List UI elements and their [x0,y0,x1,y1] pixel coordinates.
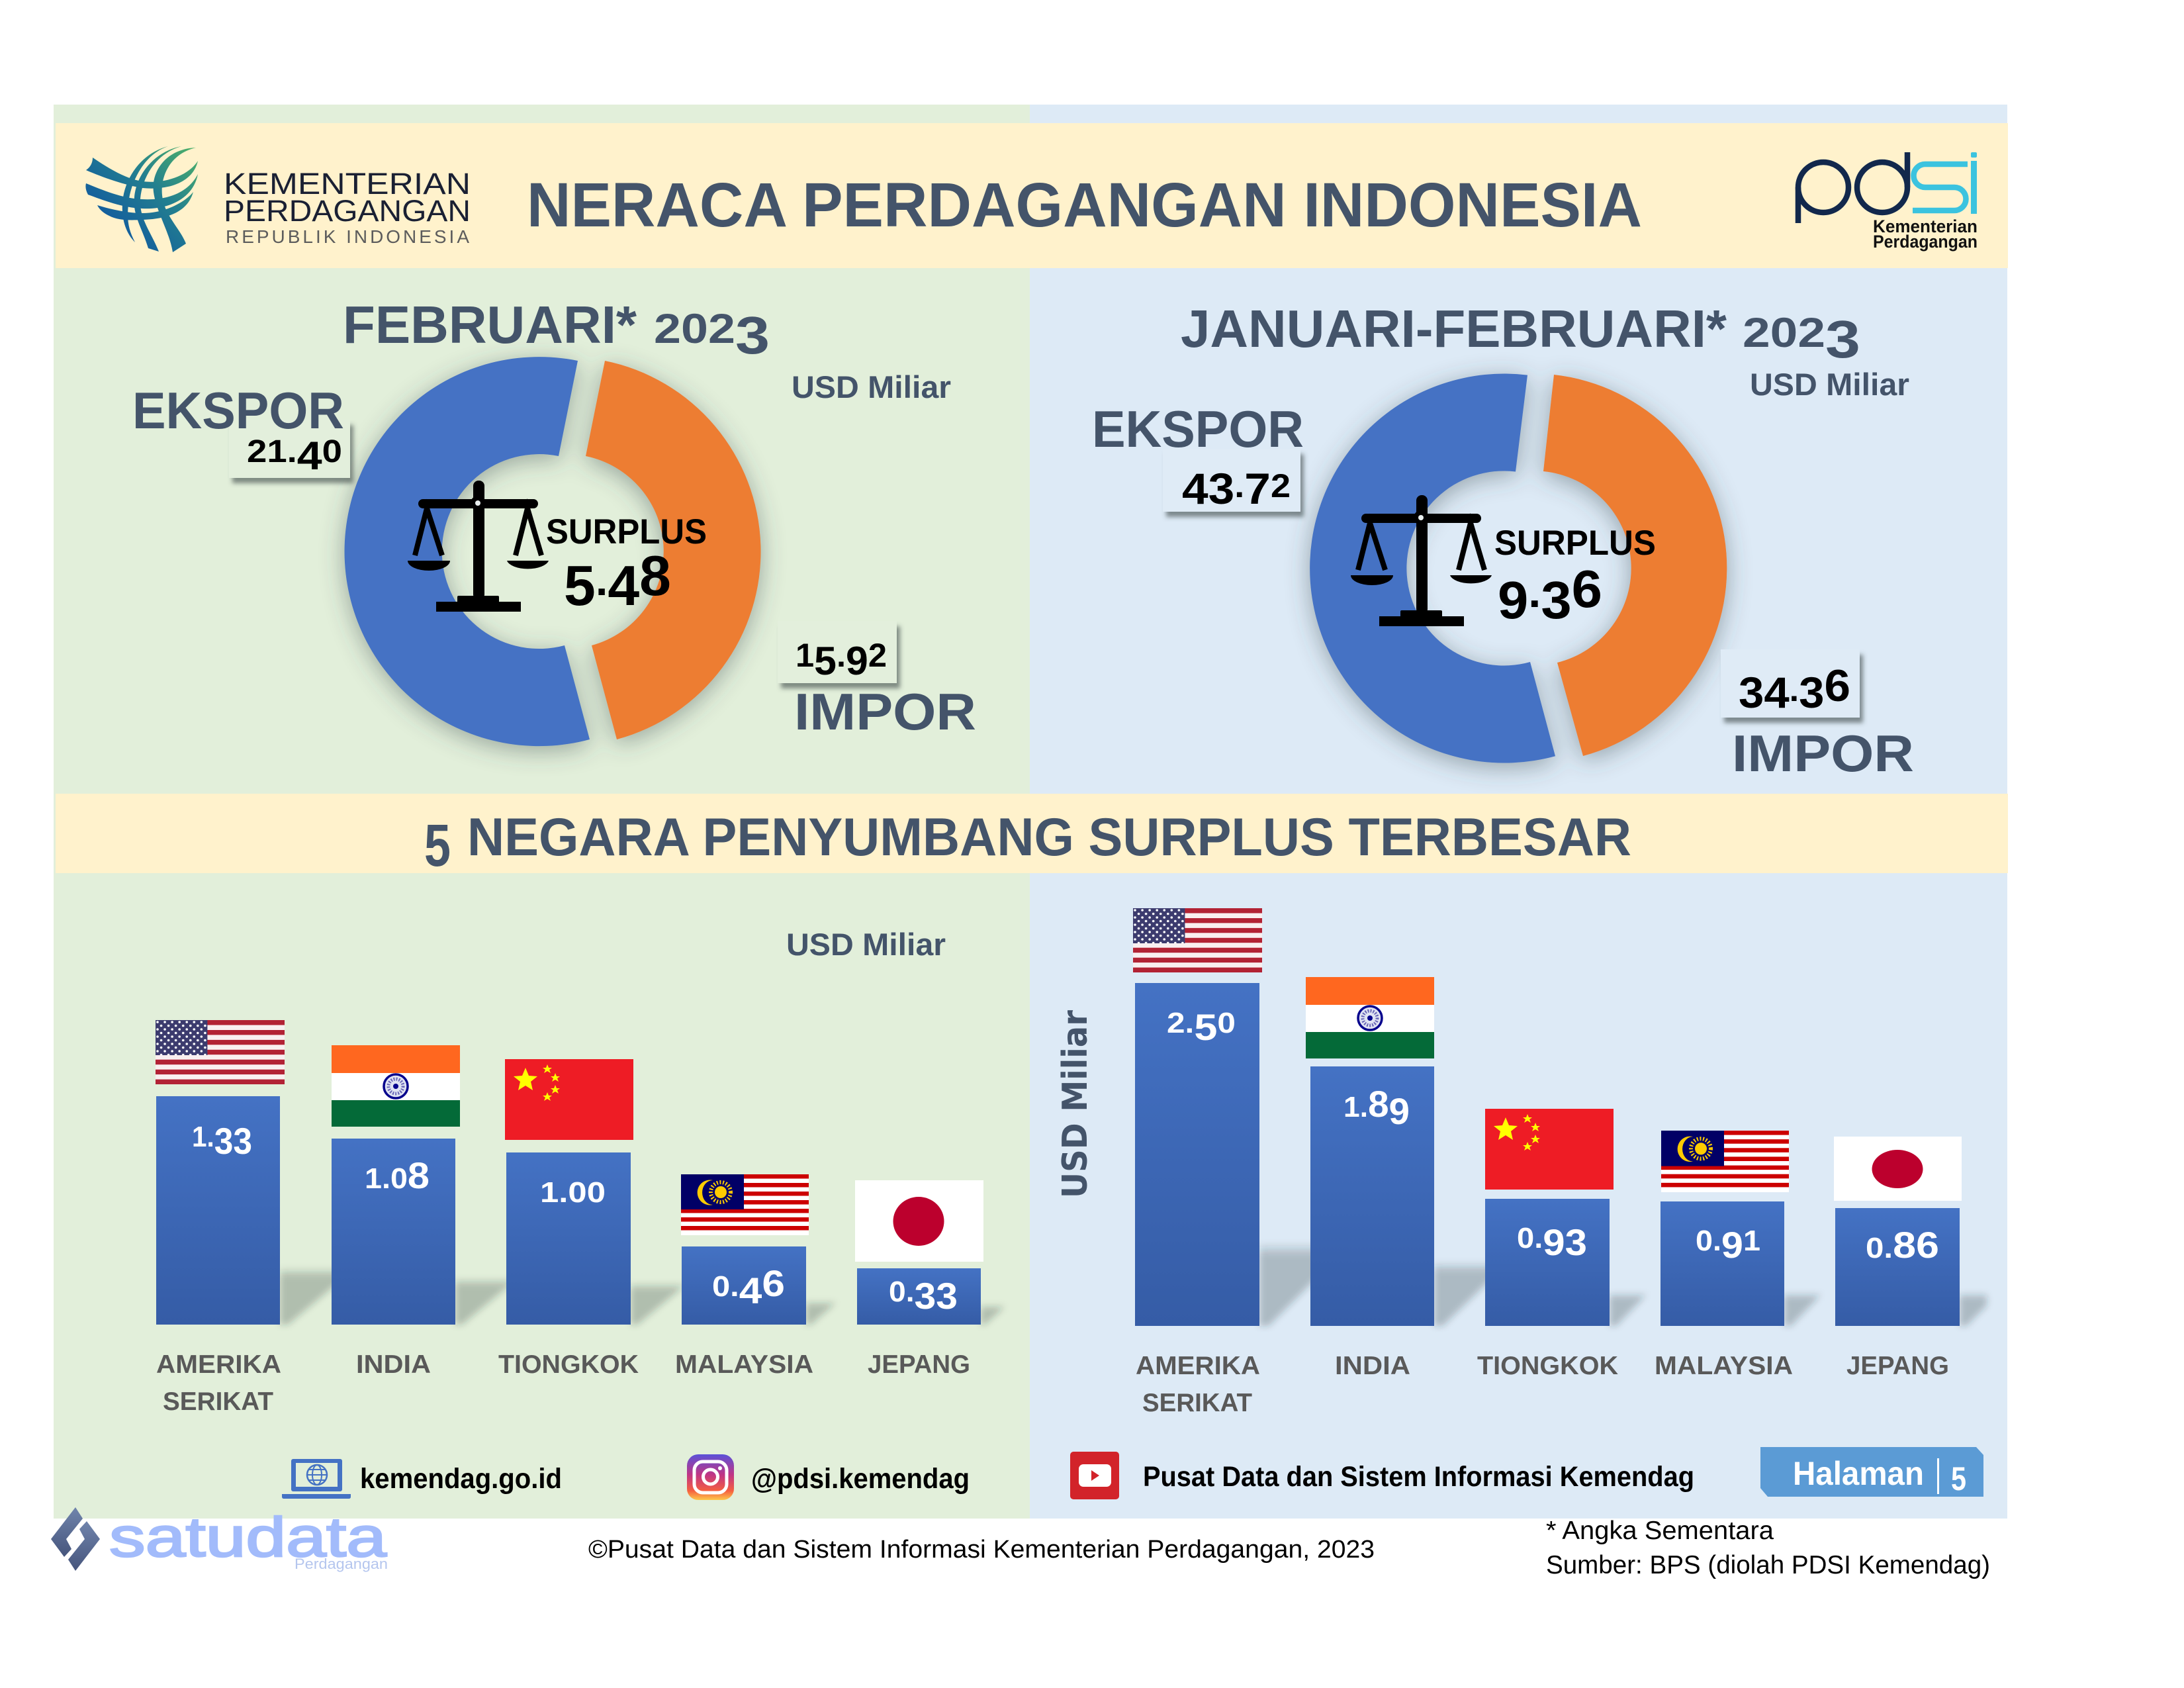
page number tag: Halaman [1793,1455,1924,1492]
logo: Satu Data [51,1506,388,1572]
label: ekspor: EKSPOR [1092,400,1304,458]
unit label: USD Miliar [1750,367,1909,402]
callout: ekspor value: 4 [297,434,322,478]
bar: India: INDIA [356,1350,431,1379]
bar: India [1306,977,1434,1380]
bar: Tiongkok: 1.00 [540,1176,606,1209]
heading: Februari 2023 [343,295,770,365]
callout: impor value: 3 [1799,668,1825,717]
icon: Kementerian Perdagangan emblem [85,146,198,252]
ministry wordmark: PERDAGANGAN [224,194,471,228]
heading: Februari 2023: 202 [654,306,723,352]
panel: Januari-Februari 2023 balance [1092,299,1914,782]
bar: India: 9 [1389,1090,1410,1132]
icon: instagram [687,1454,734,1500]
bar: Amerika Serikat: 1. [192,1121,216,1153]
bar: Amerika Serikat [156,1020,285,1416]
bar: Amerika Serikat: 2. [1167,1007,1191,1039]
callout: impor value: 2 [868,637,887,674]
surplus label [1494,524,1656,630]
callout: impor value: 9 [846,639,868,683]
source notes: * Angka Sementara [1546,1517,1774,1545]
bar: Malaysia: 1 [1743,1225,1760,1257]
callout: impor value: 5 [814,639,837,683]
unit label: USD Miliar [792,369,951,404]
callout: ekspor value: 2 [1271,467,1291,504]
footer: instagram [687,1454,970,1500]
callout: impor value [778,621,897,683]
icon: laptop globe [282,1459,351,1499]
donut chart [1310,374,1727,763]
bar: Jepang: 33 [915,1275,958,1317]
copyright: ©Pusat Data dan Sistem Informasi Kementerian Perdagangan, 2023 [588,1536,1375,1564]
surplus label: 4 [608,555,639,618]
bar: Tiongkok: 0. [1517,1222,1541,1254]
background: green and blue panels [54,105,2007,1519]
bar: Jepang: 0. [889,1276,913,1308]
callout: ekspor value: 7 [1244,464,1271,513]
title: NERACA PERDAGANGAN INDONESIA [527,170,1642,240]
bar: Tiongkok [1477,1109,1618,1380]
heading: Januari-Februari 2023: 3 [1825,310,1860,369]
footer: youtube [1070,1452,1694,1499]
bar: Jepang: 0.86 [1866,1224,1939,1266]
icon: PDSI logo: Perdagangan [1873,232,1978,252]
bar: Amerika Serikat: AMERIKA [156,1350,281,1379]
callout: impor value: 1 [796,637,814,674]
callout: impor value: 6 [1825,661,1850,711]
logo: Satu Data: satudata [109,1506,387,1568]
section band: 5 negara [56,794,2008,879]
bar: India: 1.8 [1343,1083,1388,1125]
page number tag [1760,1447,1983,1497]
page number tag: 5 [1951,1460,1966,1497]
bar: Jepang: JEPANG [868,1350,970,1379]
bar: Tiongkok: TIONGKOK [498,1350,639,1379]
heading: Januari-Februari 2023 [1181,299,1860,369]
heading: Januari-Februari 2023: JANUARI-FEBRUARI* [1181,299,1727,358]
ministry wordmark: REPUBLIK INDONESIA [226,226,469,247]
icon: balance scale [1351,495,1492,626]
surplus label: 9 [1498,571,1528,630]
icon: Satu Data diamond [51,1507,100,1571]
bar: India: INDIA [1335,1352,1410,1380]
bar: Malaysia: 6 [762,1262,785,1304]
section band: 5 negara: 5 [424,813,451,879]
unit label: USD Miliar [786,927,946,962]
bar: Amerika Serikat: AMERIKA [1136,1352,1260,1380]
source notes: Sumber: BPS (diolah PDSI Kemendag) [1546,1551,1990,1579]
ministry wordmark [224,167,471,247]
bar: Amerika Serikat: 33 [214,1120,252,1162]
heading: Februari 2023: 3 [735,306,770,365]
bar shadows [1259,1243,1987,1326]
callout: ekspor value: 21. [247,434,291,469]
header band [56,123,2008,268]
logo: Satu Data: Perdagangan [295,1556,388,1572]
surplus label: . [1528,567,1541,616]
icon: balance scale [408,481,549,612]
ministry wordmark: KEMENTERIAN [224,167,471,201]
callout: impor value: . [837,637,846,674]
bar: Jepang: JEPANG [1846,1352,1949,1380]
bar: Tiongkok: TIONGKOK [1477,1352,1618,1380]
bar: Jepang [855,1180,983,1379]
source notes [1546,1517,1990,1579]
bar: Malaysia [675,1174,813,1379]
panel: Februari 2023 balance [132,295,976,746]
surplus label: 3 [1541,571,1572,630]
section band: 5 negara: NEGARA PENYUMBANG SURPLUS TERBESAR [467,808,1631,867]
icon: PDSI logo: Kementerian [1873,216,1978,236]
bar: Malaysia: 9 [1721,1224,1743,1266]
surplus label: SURPLUS [1494,524,1656,563]
icon: PDSI logo [1798,152,1978,252]
footer: website link: kemendag.go.id [360,1463,562,1495]
bar: Amerika Serikat [1133,908,1262,1417]
panel: bar chart Februari [156,927,1006,1416]
heading: Februari 2023: FEBRUARI* [343,295,637,354]
footer: website link [282,1459,562,1499]
bar: Amerika Serikat: SERIKAT [1142,1389,1252,1417]
bar: Malaysia [1655,1131,1793,1380]
footer: instagram: @pdsi.kemendag [751,1463,970,1495]
bar: Malaysia: 4 [739,1270,762,1311]
bar: India [332,1045,460,1379]
surplus label: 6 [1572,559,1602,618]
label: impor: IMPOR [794,682,976,741]
callout: ekspor value: 0 [322,434,342,469]
bar: Malaysia: 0. [712,1270,737,1303]
panel: bar chart Januari-Februari [1056,908,1987,1417]
bar: Jepang [1834,1137,1962,1380]
heading: Januari-Februari 2023: 202 [1743,310,1812,356]
donut chart [345,357,761,746]
callout: ekspor value: 43 [1182,464,1234,513]
bar: Amerika Serikat: 5 [1194,1006,1217,1048]
callout: ekspor value: . [1234,467,1244,504]
bar: Malaysia: 0. [1696,1225,1720,1257]
callout: impor value: 34 [1739,668,1790,717]
bar: Amerika Serikat: SERIKAT [163,1387,273,1416]
bar: India: 1.08 [365,1154,430,1196]
surplus label [546,512,707,618]
footer: youtube: Pusat Data dan Sistem Informasi Kemendag [1143,1461,1694,1493]
surplus label: SURPLUS [546,512,707,551]
surplus label: 5 [564,555,596,618]
bar: Tiongkok [498,1059,639,1379]
bar: Malaysia: MALAYSIA [1655,1352,1793,1380]
label: ekspor: EKSPOR [132,381,344,440]
label: impor: IMPOR [1732,724,1914,782]
callout: impor value: . [1790,671,1799,708]
unit label rotated: USD Miliar [1056,1010,1095,1198]
icon: youtube [1070,1452,1119,1499]
surplus label: . [596,555,608,604]
bar shadows [280,1268,1006,1325]
bar: Malaysia: MALAYSIA [675,1350,813,1379]
bar: Tiongkok: 93 [1543,1221,1587,1263]
bar: Amerika Serikat: 0 [1217,1007,1236,1039]
callout: ekspor value [229,420,350,478]
surplus label: 8 [639,545,671,608]
callout: ekspor value [1163,449,1300,513]
callout: impor value [1721,649,1860,718]
